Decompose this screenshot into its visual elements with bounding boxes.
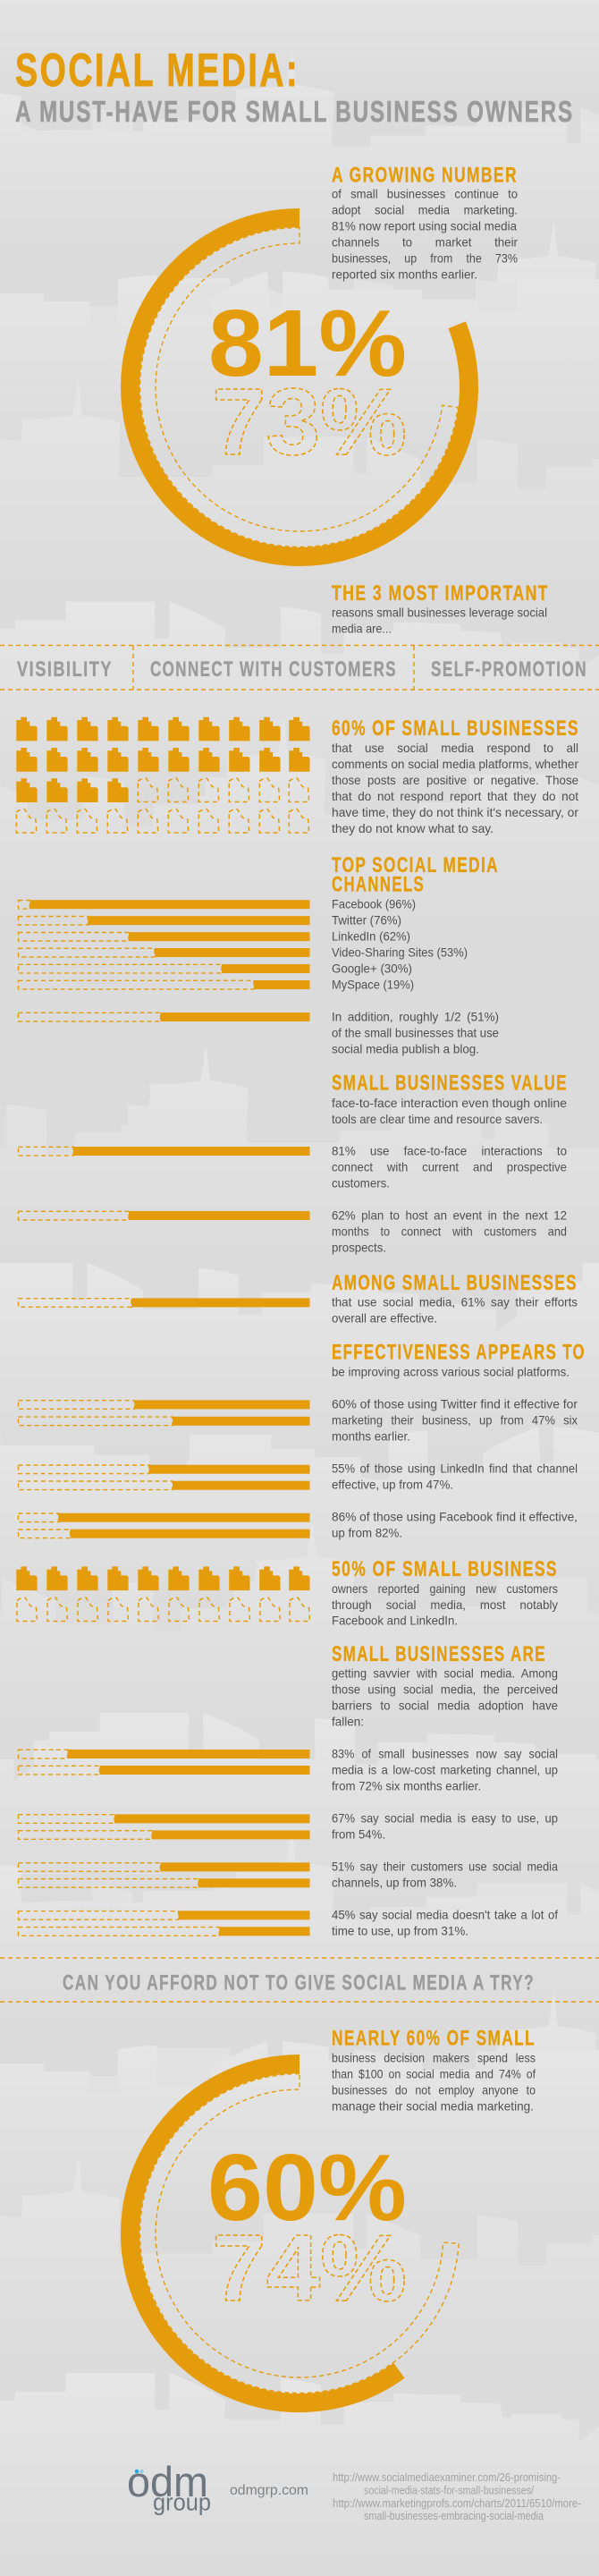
text: small businesses are [332,1642,558,1728]
text: linkedin: effective, up from 47%. [332,1478,453,1492]
text: blog: social media publish a blog. [332,1041,479,1055]
text: 50% of small business: through social media, most notably [332,1597,558,1612]
text: easy to use: 67% say social media is easy to use, up [332,1810,558,1825]
text: customers [332,1859,558,1889]
website: odmgrp.com [230,2483,308,2498]
text: time: time to use, up from 31%. [332,1923,468,1937]
text: time [332,1907,558,1937]
text: easy to use: from 54%. [332,1826,385,1841]
text: twitter [332,1397,578,1444]
text: small businesses value: tools are clear time and resource savers. [332,1112,543,1126]
text: small businesses are: those using social media, the perceived [332,1682,558,1696]
text: 50% of small business [332,1557,558,1628]
text: a growing number: reported six months earlier. [332,267,477,281]
text: top social media channels: TOP SOCIAL MEDIA [332,853,499,877]
sources: small-businesses-embracing-social-media [364,2510,544,2522]
text: 60% of small businesses: those posts are positive or negative. Those [332,773,578,787]
sources: http://www.socialmediaexaminer.com/26-promising- [333,2471,561,2484]
text: linkedin [332,1462,578,1492]
bar chart: top social media channels [18,900,309,989]
logo: odm group: group [153,2488,211,2515]
text: 50% of small business: Facebook and LinkedIn. [332,1614,458,1628]
text: 60% of small businesses: that do not respond report that they do not [332,789,578,803]
text: top social media channels: LinkedIn (62%) [332,928,410,943]
text: small businesses are: fallen: [332,1714,364,1728]
text: a growing number: of small businesses continue to [332,186,518,200]
text: 81% face-to-face [332,1143,567,1190]
text: twitter: months earlier. [332,1429,410,1444]
text: top social media channels [332,853,499,991]
text: low-cost: media is a low-cost marketing channel, up [332,1762,558,1776]
text: 62% host an event: 62% plan to host an event in the next 12 [332,1208,567,1222]
text: time: 45% say social media doesn't take a lot of [332,1907,558,1921]
text: among small businesses [332,1271,578,1326]
reason: visibility: VISIBILITY [17,657,113,682]
sources: social-media-stats-for-small-businesses/ [364,2485,534,2497]
reason: connect with customers: CONNECT WITH CUSTOMERS [150,657,397,682]
bars: low-cost 83% vs 72% [18,1750,309,1775]
text: 62% host an event [332,1208,567,1254]
text: a growing number: businesses, up from the 73% [332,250,518,265]
text: 60% of small businesses: have time, they do not think it's necessary, or [332,805,578,819]
text: small businesses value [332,1072,568,1126]
bar: 62% host an event [18,1211,309,1220]
text: top social media channels: CHANNELS [332,873,425,896]
number 60%: 60% [207,2135,407,2241]
text: the 3 most important: media are... [332,621,392,635]
text: top social media channels: MySpace (19%) [332,977,414,991]
text: nearly 60% of small: business decision makers spend less [332,2050,536,2064]
text: 81% face-to-face: connect with current and prospective [332,1159,567,1174]
text: effectiveness appears to [332,1340,586,1379]
number 81%: 81% [208,291,407,396]
text: blog [332,1009,499,1055]
text: twitter: 60% of those using Twitter find it effective for [332,1397,578,1411]
text: facebook [332,1510,578,1540]
text: a growing number: A GROWING NUMBER [332,163,518,188]
text: blog: In addition, roughly 1/2 (51%) [332,1009,499,1023]
bars: easy to use 67% vs 54% [18,1814,309,1839]
sources: http://www.marketingprofs.com/charts/2011/6510/more- [333,2497,581,2510]
text: nearly 60% of small [332,2027,536,2113]
bar: 61% effective [18,1298,309,1307]
text: a growing number: 81% now report using social media [332,218,517,233]
text: twitter: marketing their business, up from 47% six [332,1413,578,1428]
text: customers: channels, up from 38%. [332,1875,457,1889]
bar: 51% publish a blog [18,1013,309,1021]
title: SOCIAL MEDIA: [15,45,300,97]
text: nearly 60% of small: manage their social media marketing. [332,2098,534,2113]
text: low-cost: from 72% six months earlier. [332,1778,481,1792]
pictogram: 20 buildings, 10 filled [16,1566,310,1621]
text: top social media channels: Facebook (96%) [332,896,416,911]
pictogram: 40 buildings, 24 filled [16,717,310,833]
text: small businesses are: getting savvier with social media. Among [332,1665,558,1680]
text: 60% of small businesses: that use social media respond to all [332,741,578,755]
band: three reasons [0,646,599,690]
text: 60% of small businesses: comments on social media platforms, whether [332,757,578,771]
text: nearly 60% of small: than $100 on social media and 74% of [332,2066,536,2080]
text: effectiveness appears to: be improving across various social platforms. [332,1365,569,1379]
bars: facebook 86% vs 82% [18,1513,309,1538]
logo: odm group: odm [127,2458,208,2505]
bars: twitter 60% vs 47% [18,1400,309,1426]
dashed arc 74% [139,2073,459,2394]
text: linkedin: 55% of those using LinkedIn find that channel [332,1462,578,1476]
bars: linkedin 55% vs 47% [18,1465,309,1490]
bar: 81% face-to-face [18,1147,309,1156]
text: 60% of small businesses: they do not know what to say. [332,821,494,835]
text: the 3 most important: reasons small businesses leverage social [332,605,547,619]
chart: 60% vs 74% ring [131,2064,459,2402]
text: among small businesses: that use social media, 61% say their efforts [332,1295,578,1309]
dashed arc 73% [140,227,458,547]
text: 60% of small businesses [332,716,579,835]
text: small businesses value: face-to-face interaction even though online [332,1096,567,1110]
text: blog: of the small businesses that use [332,1025,499,1039]
text: low-cost: 83% of small businesses now say social [332,1746,558,1760]
bars: time 45% vs 31% [18,1911,309,1936]
solid arc 60% [131,2064,399,2402]
sources [333,2471,581,2522]
text: small businesses are: barriers to social media adoption have [332,1698,558,1712]
text: 62% host an event: prospects. [332,1240,386,1254]
text: 81% face-to-face: 81% use face-to-face interactions to [332,1143,567,1157]
number 73%: 73% [212,369,407,475]
text: 81% face-to-face: customers. [332,1175,390,1190]
text: the 3 most important [332,581,549,635]
text: facebook: up from 82%. [332,1526,402,1540]
number 74%: 74% [212,2216,407,2321]
text: 62% host an event: months to connect with customers and [332,1224,567,1238]
text: nearly 60% of small: businesses do not employ anyone to [332,2082,536,2097]
text: facebook: 86% of those using Facebook find it effective, [332,1510,578,1524]
chart: 81% vs 73% ring [131,218,469,556]
text: a growing number: channels to market their [332,234,518,249]
text: 50% of small business: owners reported gaining new customers [332,1581,558,1596]
bars: customers 51% vs 38% [18,1862,309,1887]
text: top social media channels: Twitter (76%) [332,912,401,927]
title [15,45,574,128]
text: among small businesses: overall are effective. [332,1311,437,1326]
text: top social media channels: Google+ (30%) [332,961,412,975]
text: a growing number: adopt social media marketing. [332,202,518,216]
text: top social media channels: Video-Sharing Sites (53%) [332,945,468,959]
text: customers: 51% say their customers use social media [332,1859,558,1873]
solid arc 81% [131,218,469,556]
text: a growing number [332,163,518,281]
text: easy to use [332,1810,558,1841]
text: low-cost [332,1746,558,1792]
